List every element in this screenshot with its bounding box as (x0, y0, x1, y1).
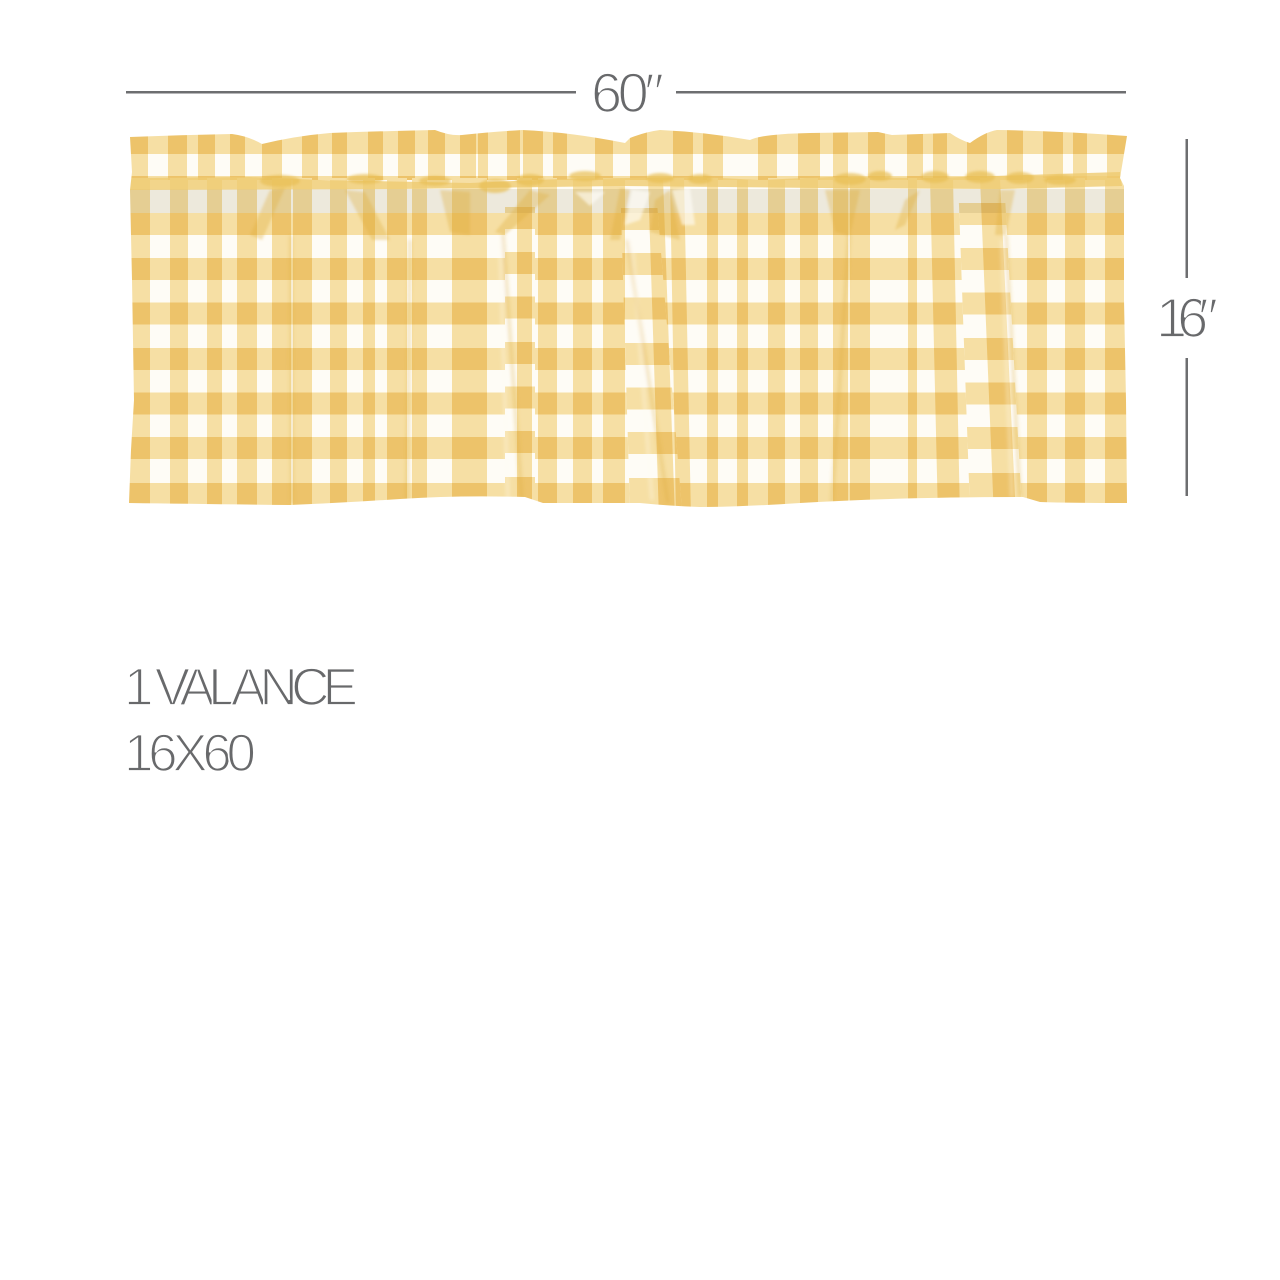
grey shade under gather band (130, 189, 1130, 213)
height label: 16 inches: 16″ (1156, 286, 1218, 349)
vertical stripes (129, 178, 1127, 518)
gathered rod pocket band (130, 171, 1122, 193)
body check pattern (120, 178, 1140, 518)
gather darts below band (250, 188, 1015, 240)
product size label: 16X60 (124, 724, 256, 783)
width dimension line (126, 91, 1126, 94)
fabric base (148, 154, 1107, 483)
product count label: 1 VALANCE (124, 658, 358, 717)
header ruffle check pattern (130, 130, 1127, 180)
height dimension line (1186, 139, 1188, 496)
panel: yellow gingham valance curtain (120, 120, 1140, 520)
horizontal stripes, shifted inside folds (120, 203, 1140, 513)
width label: 60 inches: 60″ (591, 61, 664, 124)
fold shading (291, 235, 1020, 503)
